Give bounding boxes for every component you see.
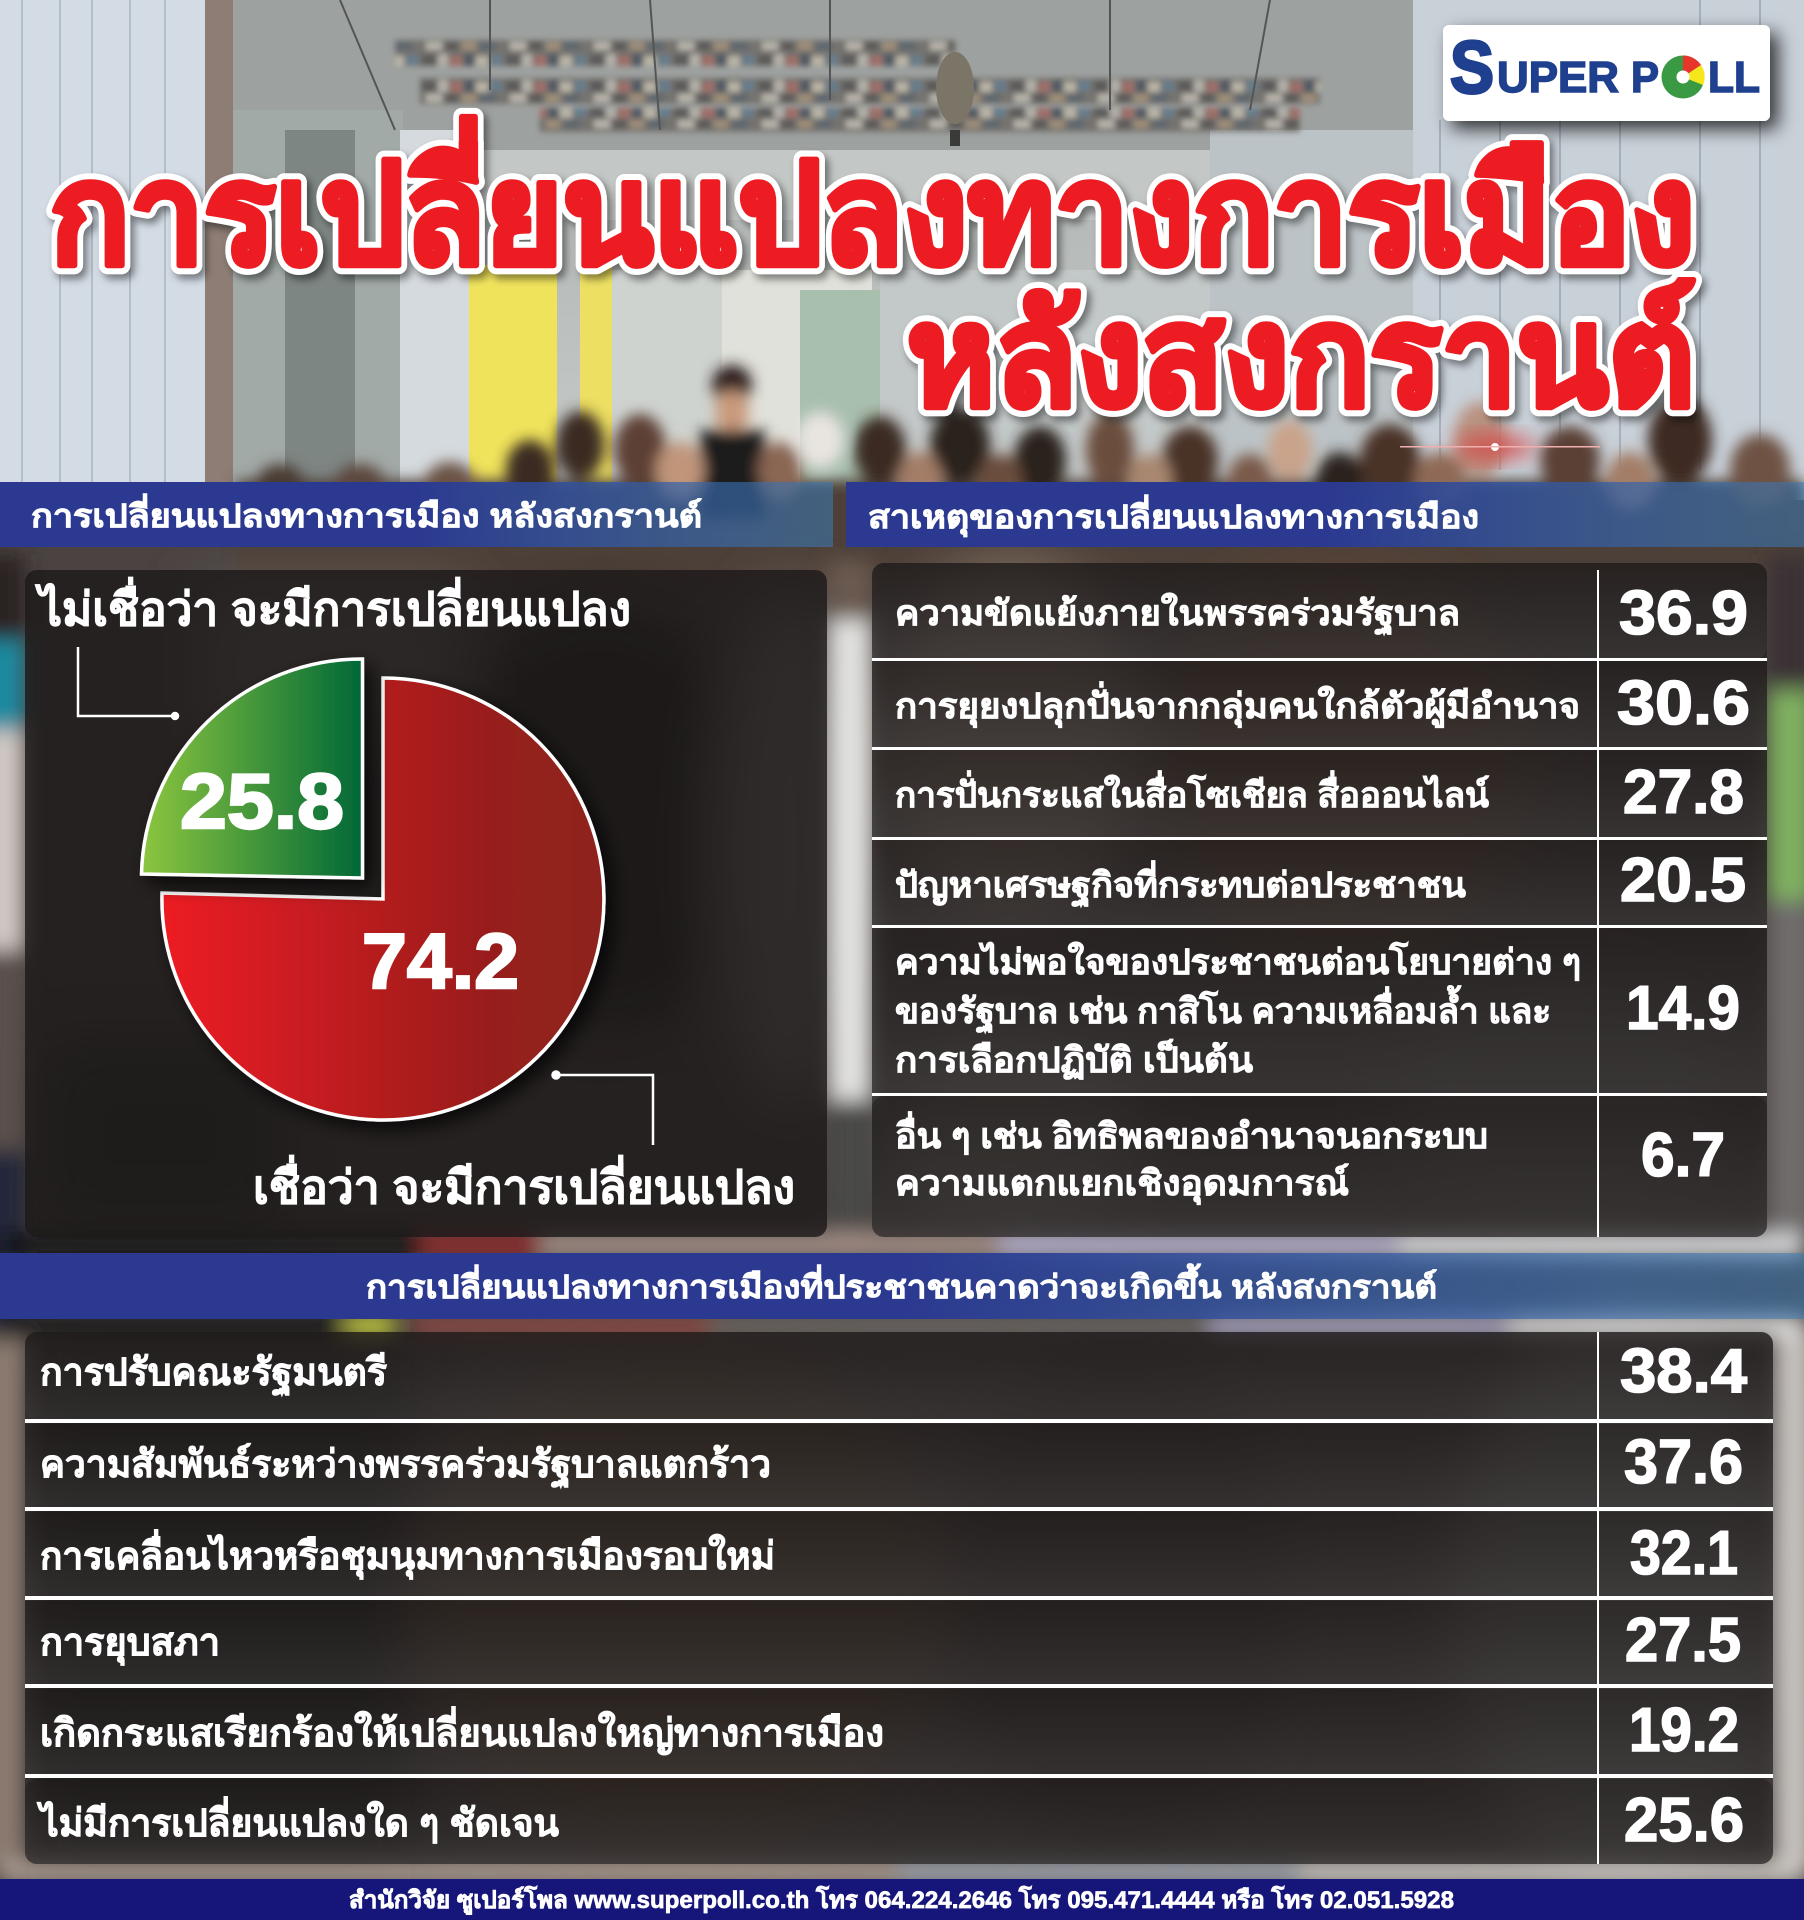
pie label: do not believe: ไม่เชื่อว่า จะมีการเปลี่ยนแปลง [34,577,631,635]
side strips and gaps [0,555,1804,1884]
heading bar: right: สาเหตุของการเปลี่ยนแปลงทางการเมือง [868,494,1479,538]
cause row 2 [895,669,1750,738]
pie slice: green 25.8 [142,659,362,878]
logo: Super Poll [1443,25,1770,121]
cause row 5: ของรัฐบาล เช่น กาสิโน ความเหลื่อมล้ำ และ [895,985,1551,1034]
change row 4 [40,1606,1741,1675]
cause row 4: ปัญหาเศรษฐกิจที่กระทบต่อประชาชน [895,860,1466,908]
footer bar [0,1879,1804,1920]
ceiling stripes [395,40,1320,132]
cause row 6 [895,1111,1725,1205]
title: การเปลี่ยนแปลงทางการเมือง [50,116,1695,293]
connector: red slice [552,1072,653,1145]
cause row 4: 20.5 [1620,846,1746,915]
cause row 1: 36.9 [1619,579,1748,648]
cause row 1: ความขัดแย้งภายในพรรคร่วมรัฐบาล [895,592,1460,636]
cause row 3 [895,758,1744,827]
change row 6: 25.6 [1624,1786,1744,1855]
panel: expected changes table [25,1332,1773,1864]
cause row 3: การปั่นกระแสในสื่อโซเชียล สื่อออนไลน์ [895,770,1489,815]
change row 6 [36,1786,1744,1855]
value: 25.8: 25.8 [180,757,344,845]
value: 74.2: 74.2 [362,917,519,1005]
soft bodies in the lower photo [30,560,1790,1890]
cause row 2: 30.6 [1617,669,1750,738]
change row 5: เกิดกระแสเรียกร้องให้เปลี่ยนแปลงใหญ่ทางการเมือง [40,1706,884,1755]
cause row 6: ความแตกแยกเชิงอุดมการณ์ [895,1163,1349,1205]
heading bar: expected changes [0,1253,1804,1319]
pie label: believe: เชื่อว่า จะมีการเปลี่ยนแปลง [253,1155,795,1213]
change row 6: ไม่มีการเปลี่ยนแปลงใด ๆ ชัดเจน [36,1796,559,1845]
logo: Super Poll: UPER [1497,53,1619,102]
footer bar: สำนักวิจัย ซูเปอร์โพล www.superpoll.co.th โทร 064.224.2646 โทร 095.471.4444 หรือ โทร 02.051.5928 [349,1885,1454,1915]
title: หลังสงกรานต์ [907,278,1695,435]
change row 5 [40,1696,1739,1765]
change row 1: การปรับคณะรัฐมนตรี [40,1352,388,1397]
cause row 3: 27.8 [1623,758,1744,827]
cause row 4 [895,846,1746,915]
connector: green slice [78,647,178,719]
heading bar: right [846,482,1804,547]
cause row 5: ความไม่พอใจของประชาชนต่อนโยบายต่าง ๆ [895,941,1581,982]
pie slice: red 74.2 [162,678,604,1120]
crowd heads band [236,365,1804,580]
change row 2: ความสัมพันธ์ระหว่างพรรคร่วมรัฐบาลแตกร้าว [40,1443,771,1489]
logo: Super Poll: P [1631,53,1659,102]
cause row 5: การเลือกปฏิบัติ เป็นต้น [895,1038,1253,1080]
change row 5: 19.2 [1629,1696,1739,1765]
cause row 2: การยุยงปลุกปั่นจากกลุ่มคนใกล้ตัวผู้มีอำนาจ [895,681,1580,728]
logo: Super Poll: S [1450,26,1494,109]
logo: Super Poll: LL [1708,53,1760,102]
red lens flare [1400,433,1600,461]
cause row 5 [895,941,1740,1080]
heading bar: left [0,482,833,547]
change row 4: 27.5 [1625,1606,1741,1675]
title [50,116,1695,435]
change row 1 [40,1337,1748,1406]
change row 2: 37.6 [1624,1428,1743,1497]
panel: causes table [872,563,1767,1237]
change row 4: การยุบสภา [40,1622,220,1666]
change row 3 [40,1519,1738,1588]
change row 3: การเคลื่อนไหวหรือชุมนุมทางการเมืองรอบใหม่ [40,1529,775,1580]
logo donut [1662,55,1705,98]
change row 2 [40,1428,1743,1497]
cause row 1 [895,579,1748,648]
cause row 5: 14.9 [1626,974,1740,1043]
cause row 6: 6.7 [1641,1121,1725,1190]
title: การเปลี่ยนแปลงทางการเมือง [50,116,1695,293]
change row 1: 38.4 [1620,1337,1748,1406]
heading bar: expected changes: การเปลี่ยนแปลงทางการเมืองที่ประชาชนคาดว่าจะเกิดขึ้น หลังสงกรานต์ [366,1263,1437,1305]
panel: pie chart [25,570,827,1237]
cause row 6: อื่น ๆ เช่น อิทธิพลของอำนาจนอกระบบ [895,1111,1488,1156]
change row 3: 32.1 [1630,1519,1738,1588]
title: หลังสงกรานต์ [907,278,1695,435]
heading bar: left: การเปลี่ยนแปลงทางการเมือง หลังสงกรานต์ [31,493,702,534]
